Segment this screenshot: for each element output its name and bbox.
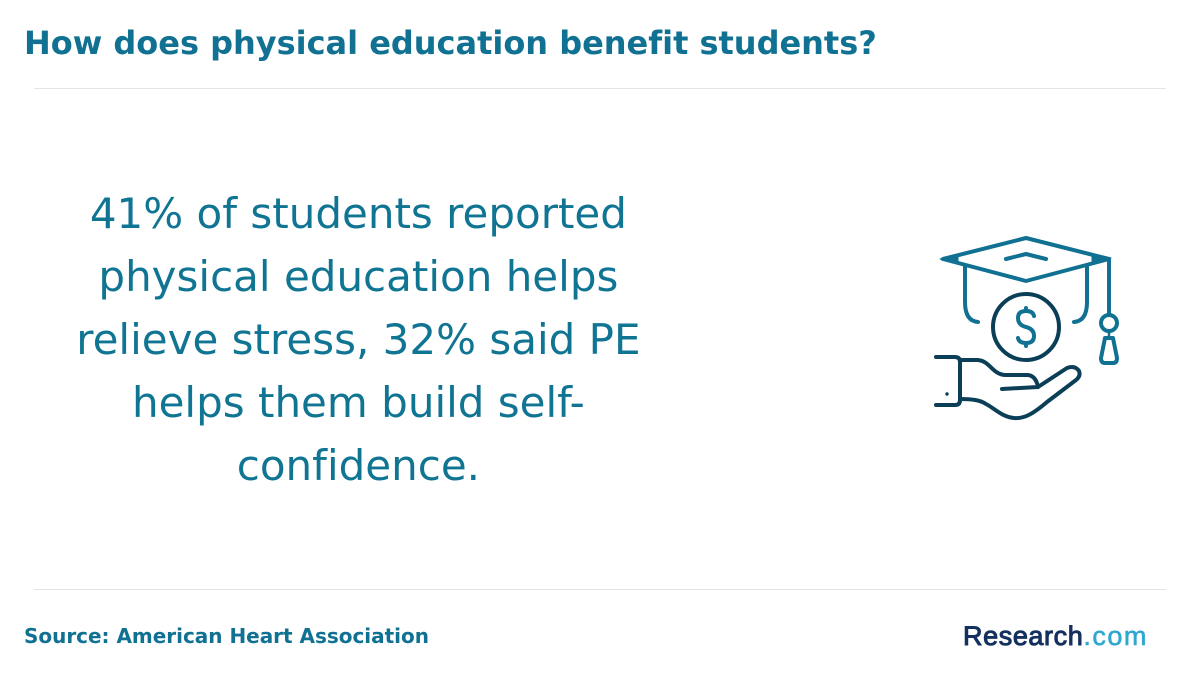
title: How does physical education benefit students? <box>24 24 877 62</box>
text block: statistics: 41% of students reported physical education helps relieve stress, 32% said PE helps them build self-confidence. <box>76 189 641 490</box>
source: Source: American Heart Association <box>24 624 429 648</box>
icon: dollar coin <box>993 294 1059 360</box>
icon: open hand <box>936 357 1080 418</box>
logo: Research.com: Research.com <box>963 621 1148 651</box>
icon: graduation cap <box>940 238 1117 363</box>
